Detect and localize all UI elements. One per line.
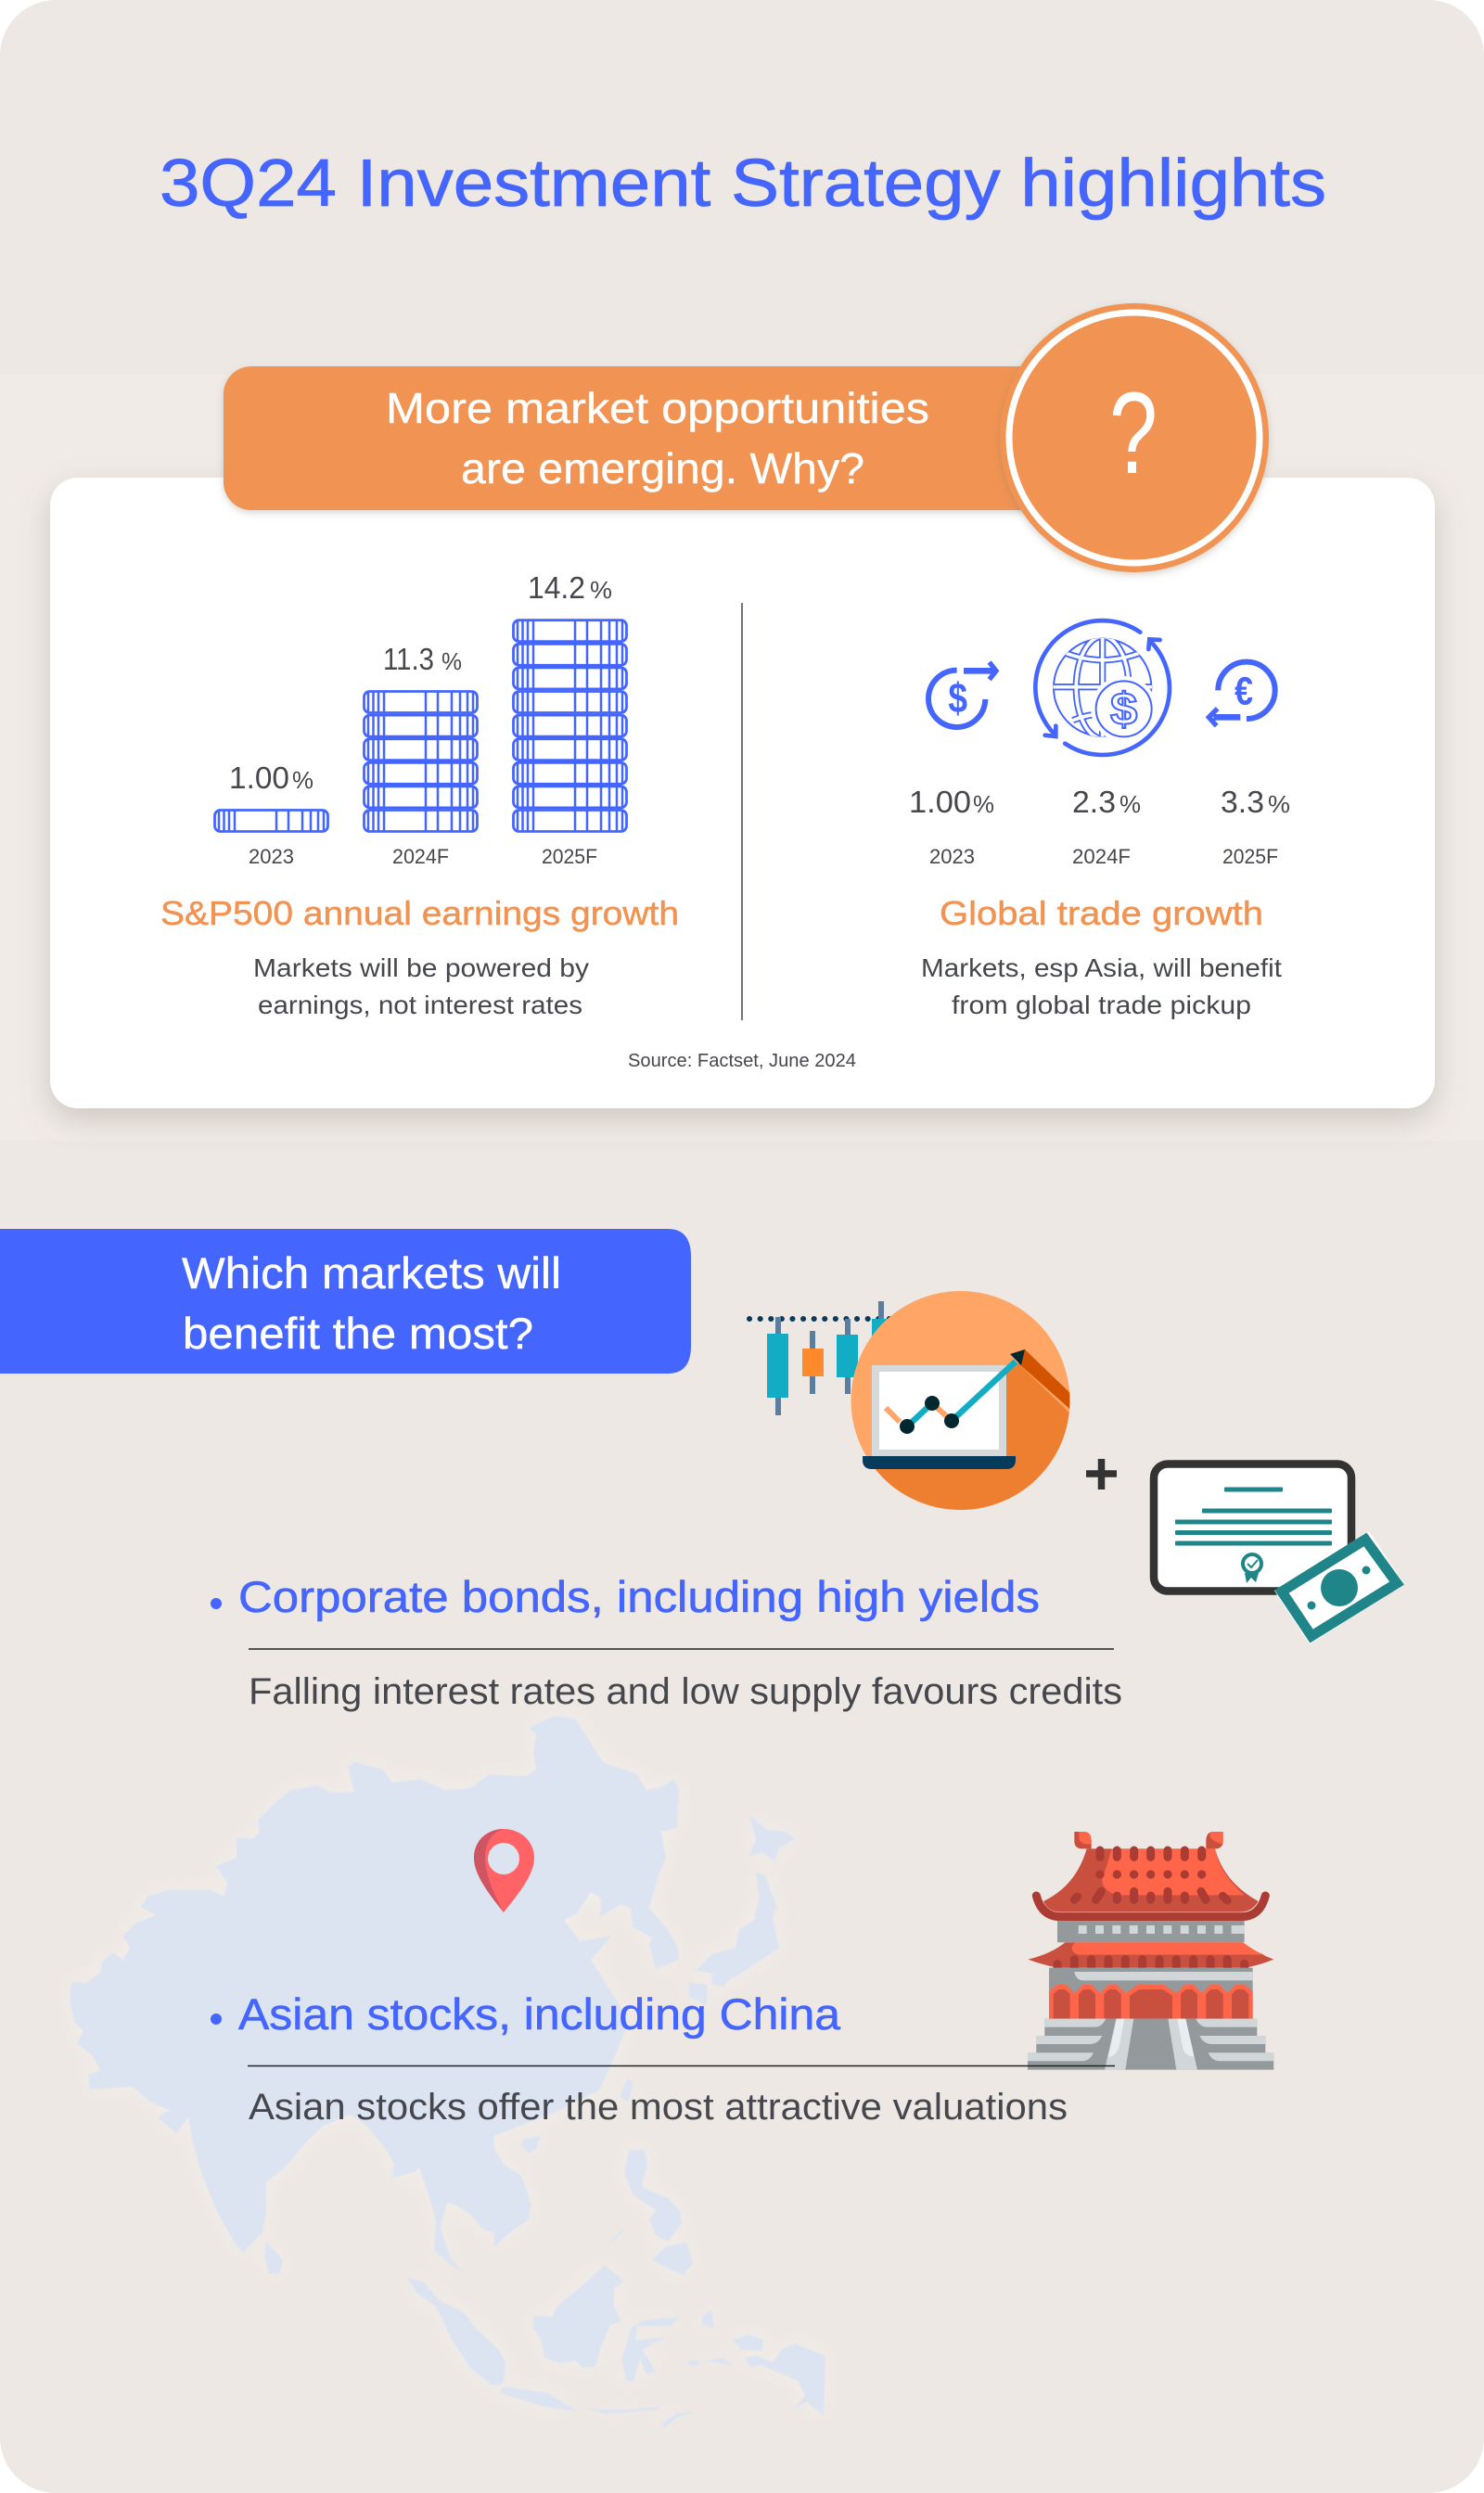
callout: which markets banner: Which markets will — [182, 1248, 561, 1298]
item: corporate bonds: Falling interest rates and low supply favours credits — [249, 1671, 1122, 1712]
icon: question mark badge — [1000, 303, 1269, 572]
banner text: are emerging. Why? — [461, 444, 864, 492]
banner text: More market opportunities — [386, 384, 929, 432]
bar 2024F: 11.3 — [383, 642, 434, 676]
icon: location pin — [474, 1829, 534, 1912]
icons: global trade — [928, 620, 1275, 755]
icon: globe with dollar: $ — [1110, 684, 1137, 735]
icon: euro exchange: € — [1235, 670, 1253, 714]
icon: globe with dollar — [1035, 620, 1170, 755]
text: global trade description: from global trade pickup — [952, 991, 1251, 1019]
bar 2025F — [514, 570, 627, 868]
values: global trade growth: 2.3 — [1072, 785, 1116, 819]
bar 2025F: 14.2 — [528, 570, 585, 605]
text: S&P500 description: Markets will be powered by — [253, 953, 589, 982]
icon: euro exchange — [1209, 662, 1275, 726]
bar 2025F: % — [590, 576, 612, 604]
bar 2023: 1.00 — [229, 761, 289, 795]
icon: Chinese temple — [1028, 1832, 1273, 2070]
values: global trade growth: 2025F — [1222, 845, 1278, 868]
values: global trade growth: % — [1119, 790, 1141, 818]
banner text — [386, 384, 929, 492]
icon: dollar exchange — [928, 662, 996, 727]
heading: S&P500: S&P500 annual earnings growth — [160, 894, 679, 932]
bar 2024F: 2024F — [392, 845, 449, 868]
title: 3Q24 Investment Strategy highlights — [160, 147, 1326, 221]
map: Asia background — [70, 1716, 825, 2430]
bar 2025F: 2025F — [542, 845, 597, 868]
item: corporate bonds: Corporate bonds, including high yields — [238, 1572, 1040, 1621]
item: Asian stocks: Asian stocks offer the most attractive valuations — [249, 2087, 1068, 2128]
panel: market opportunities card — [50, 478, 1435, 1108]
callout: orange question banner — [224, 303, 1269, 572]
icon: bond certificate and banknote — [1154, 1464, 1404, 1644]
text: global trade description: Markets, esp Asia, will benefit — [921, 953, 1282, 982]
bar 2023 — [215, 761, 328, 868]
values: global trade growth: % — [973, 790, 994, 818]
bar 2023: % — [292, 766, 313, 794]
text: global trade description — [921, 953, 1282, 1019]
values: global trade growth — [909, 785, 1290, 868]
bar 2024F — [364, 642, 477, 868]
values: global trade growth: 1.00 — [909, 785, 971, 819]
chart: S&P500 coin stacks — [215, 570, 627, 868]
item: Asian stocks — [211, 1989, 1115, 2128]
icon: candlestick chart with laptop — [749, 1291, 1076, 1521]
item: Asian stocks: Asian stocks, including China — [238, 1989, 841, 2039]
callout: which markets banner: benefit the most? — [183, 1309, 533, 1358]
bar 2024F: % — [441, 647, 462, 675]
values: global trade growth: % — [1268, 790, 1290, 818]
source note: Source: Factset, June 2024 — [628, 1051, 856, 1071]
values: global trade growth: 2023 — [929, 845, 975, 868]
values: global trade growth: 3.3 — [1221, 785, 1264, 819]
text: S&P500 description: earnings, not interest rates — [258, 991, 582, 1019]
icon: question mark badge: ? — [1109, 369, 1158, 498]
callout: which markets banner — [0, 1229, 691, 1374]
item: corporate bonds — [211, 1572, 1122, 1712]
icon: plus — [1086, 1459, 1117, 1489]
icon: dollar exchange: $ — [948, 674, 967, 722]
text: S&P500 description — [253, 953, 589, 1019]
bar 2023: 2023 — [249, 845, 294, 868]
values: global trade growth: 2024F — [1072, 845, 1131, 868]
heading: global trade: Global trade growth — [940, 894, 1263, 932]
